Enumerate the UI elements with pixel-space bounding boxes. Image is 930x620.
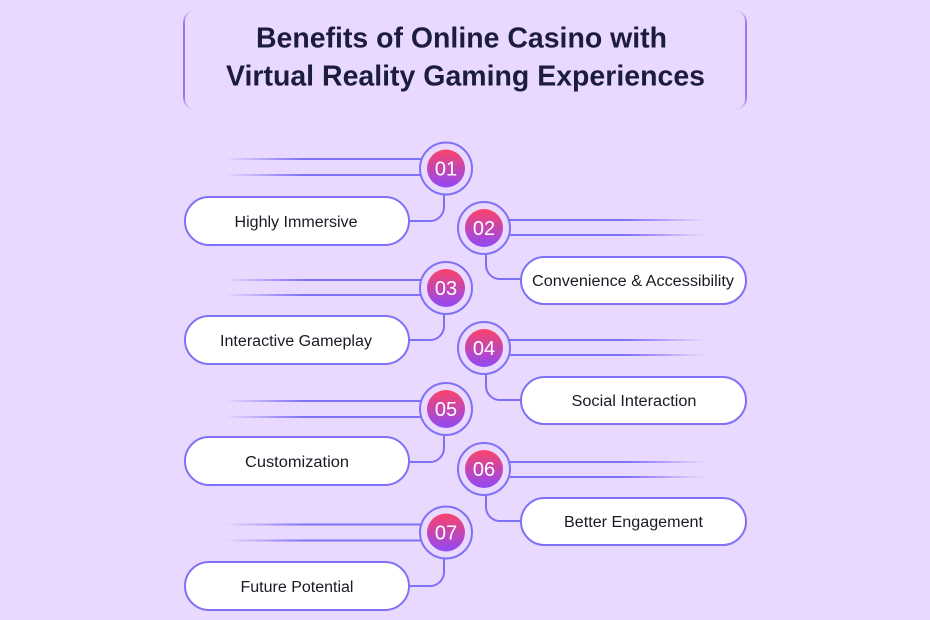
item 06: Better Engagement: 06 <box>473 459 495 481</box>
item 06: Better Engagement: Better Engagement <box>564 514 704 531</box>
item 05: Customization: 05 <box>435 399 457 421</box>
item 07: Future Potential <box>185 506 472 610</box>
item 06: Better Engagement <box>458 443 746 545</box>
item 02: Convenience & Accessibility: 02 <box>473 218 495 240</box>
item 07: Future Potential: 07 <box>435 522 457 544</box>
title panel <box>184 10 746 110</box>
item 05: Customization: Customization <box>245 454 349 471</box>
item 02: Convenience & Accessibility <box>458 202 746 304</box>
item 01: Highly Immersive: Highly Immersive <box>234 214 358 231</box>
item 01: Highly Immersive <box>185 142 472 245</box>
item 04: Social Interaction: 04 <box>473 338 495 360</box>
item 05: Customization <box>185 383 472 485</box>
title panel: Benefits of Online Casino with <box>256 22 667 54</box>
item 03: Interactive Gameplay: Interactive Gameplay <box>220 333 372 350</box>
item 04: Social Interaction <box>458 322 746 424</box>
item 07: Future Potential: Future Potential <box>240 579 354 596</box>
item 04: Social Interaction: Social Interaction <box>572 393 696 410</box>
item 01: Highly Immersive: 01 <box>435 158 457 180</box>
item 03: Interactive Gameplay <box>185 262 472 364</box>
item 02: Convenience & Accessibility: Convenience & Accessibility <box>532 273 734 290</box>
title panel: Virtual Reality Gaming Experiences <box>226 60 705 92</box>
item 03: Interactive Gameplay: 03 <box>435 278 457 300</box>
